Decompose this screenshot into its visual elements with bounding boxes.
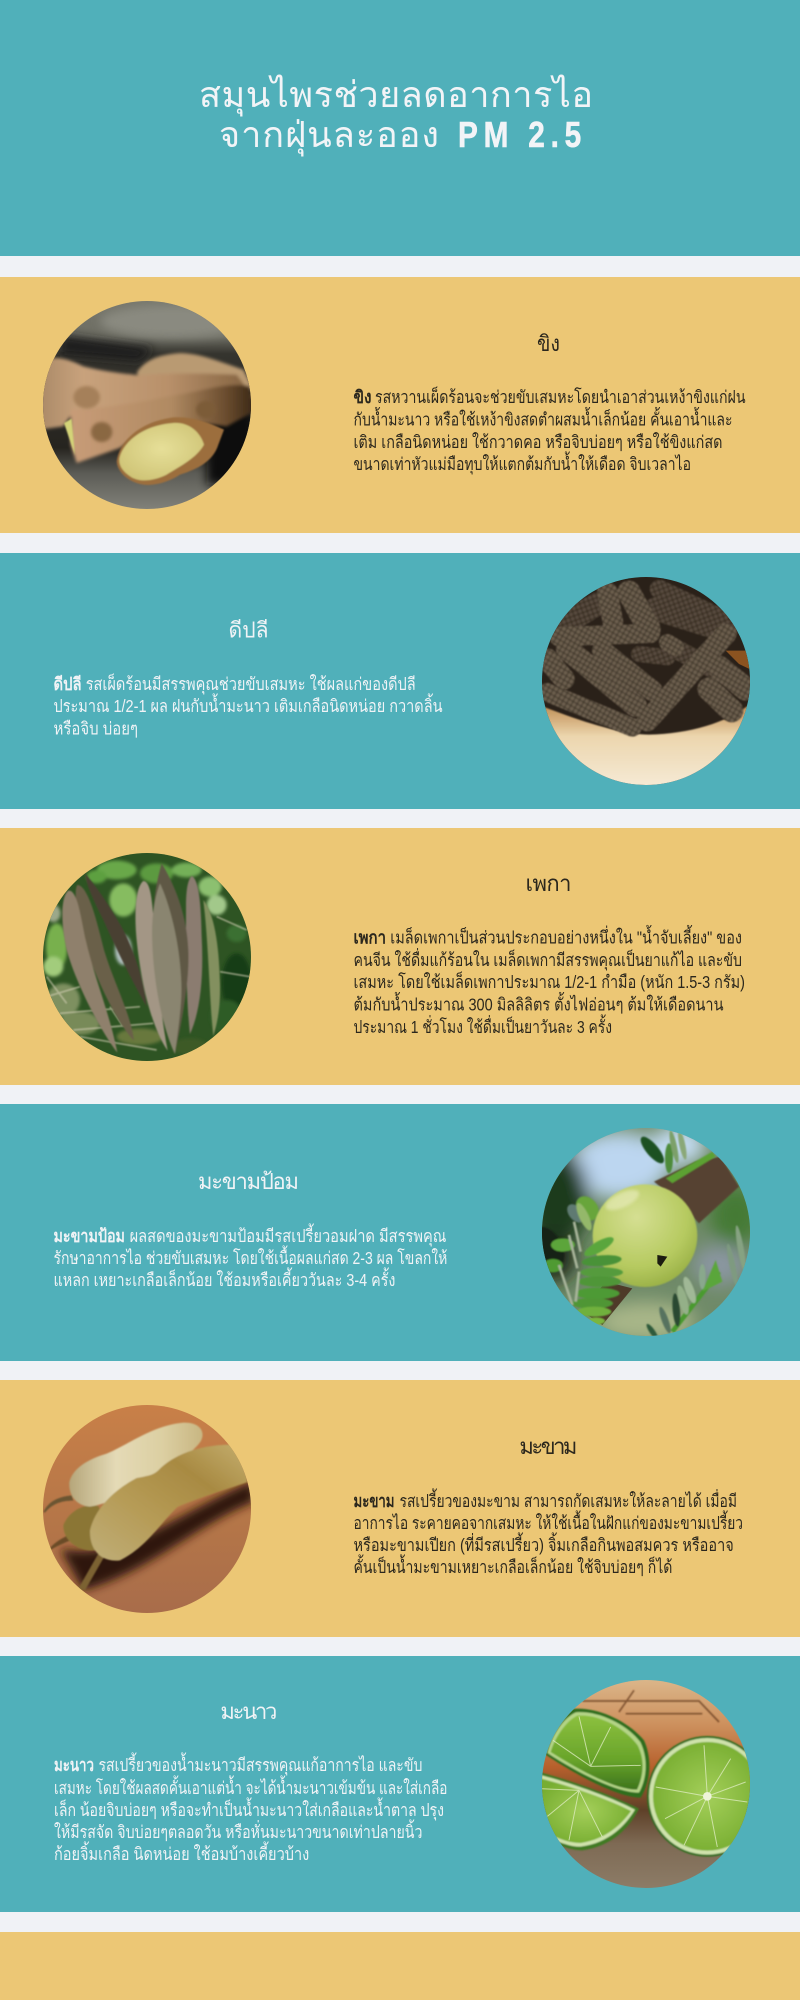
panel: ginger — [0, 277, 800, 533]
text: long pepper: ประมาณ 1/2-1 ผล ฝนกับน้ำมะนาว เติมเกลือนิดหน่อย กวาดลิ้น — [54, 693, 443, 716]
panel: lime — [0, 1656, 800, 1912]
text: amla: มะขามป้อม — [54, 1226, 125, 1246]
heading: amla: มะขามป้อม — [198, 1169, 299, 1194]
text: amla: แหลก เหยาะเกลือเล็กน้อย ใช้อมหรือเคี้ยววันละ 3-4 ครั้ง — [54, 1267, 395, 1290]
text: lime: ให้มีรสจัด จิบบ่อยๆตลอดวัน หรือหั่นมะนาวขนาดเท่าปลายนิ้ว — [54, 1819, 422, 1842]
photo: tamarind — [40, 1402, 254, 1616]
text: lime: เสมหะ โดยใช้ผลสดคั้นเอาแต่น้ำ จะได้น้ำมะนาวเข้มข้น และใส่เกลือ — [54, 1775, 447, 1798]
title: จากฝุ่นละออง — [219, 114, 439, 157]
photo: ginger — [40, 298, 254, 512]
panel: long pepper — [0, 553, 800, 809]
text: tamarind — [354, 1488, 743, 1577]
photo: lime — [542, 1680, 750, 1888]
photo: long pepper — [539, 574, 753, 788]
text: ginger: ขนาดเท่าหัวแม่มือทุบให้แตกต้มกับน้ำให้เดือด จิบเวลาไอ — [354, 451, 691, 475]
text: pheka — [354, 924, 745, 1037]
text: lime: มะนาว — [54, 1755, 94, 1775]
panel: header — [0, 0, 800, 256]
text: lime — [54, 1752, 447, 1864]
text: long pepper: หรือจิบ บ่อยๆ — [54, 718, 138, 738]
text: pheka: ประมาณ 1 ชั่วโมง ใช้ดื่มเป็นยาวันละ 3 ครั้ง — [354, 1014, 612, 1037]
text: amla: รักษาอาการไอ ช่วยขับเสมหะ โดยใช้เนื้อผลแก่สด 2-3 ผล โขลกให้ — [54, 1245, 447, 1268]
panel: footer band — [0, 1932, 800, 2000]
heading: tamarind: มะขาม — [519, 1434, 577, 1459]
text: long pepper: รสเผ็ดร้อนมีสรรพคุณช่วยขับเสมหะ ใช้ผลแก่ของดีปลี — [86, 673, 416, 695]
text: tamarind: มะขาม — [354, 1491, 394, 1511]
text: long pepper — [54, 673, 443, 738]
text: lime: เล็ก น้อยจิบบ่อยๆ หรือจะทำเป็นน้ำมะนาวใส่เกลือและน้ำตาล ปรุง — [54, 1797, 444, 1821]
panel: tamarind — [0, 1380, 800, 1637]
panel: amla — [0, 1104, 800, 1361]
photo: amla — [542, 1128, 750, 1336]
heading: ginger: ขิง — [537, 331, 560, 356]
text: ginger — [354, 386, 746, 475]
text: lime: ก้อยจิ้มเกลือ นิดหน่อย ใช้อมบ้างเคี้ยวบ้าง — [54, 1841, 309, 1864]
heading: lime: มะนาว — [220, 1699, 277, 1724]
text: tamarind: คั้นเป็นน้ำมะขามเหยาะเกลือเล็กน้อย ใช้จิบบ่อยๆ ก็ได้ — [354, 1554, 672, 1577]
title: PM 2.5 — [458, 114, 587, 155]
text: ginger: ขิง — [354, 387, 372, 407]
title — [199, 74, 593, 157]
text: pheka: เพกา — [354, 928, 386, 948]
heading: long pepper: ดีปลี — [228, 618, 268, 642]
text: amla — [54, 1223, 447, 1290]
panel: pheka — [0, 828, 800, 1085]
text: amla: ผลสดของมะขามป้อมมีรสเปรี้ยวอมฝาด มีสรรพคุณ — [130, 1223, 446, 1247]
title: สมุนไพรช่วยลดอาการไอ — [199, 74, 593, 117]
text: lime: รสเปรี้ยวของน้ำมะนาวมีสรรพคุณแก้อาการไอ และขับ — [98, 1752, 422, 1776]
text: tamarind: หรือมะขามเปียก (ที่มีรสเปรี้ยว) จิ้มเกลือกินพอสมควร หรืออาจ — [354, 1532, 734, 1555]
heading: pheka: เพกา — [526, 871, 572, 896]
photo: pheka pods — [40, 850, 254, 1064]
text: ginger: เติม เกลือนิดหน่อย ใช้กวาดคอ หรือจิบบ่อยๆ หรือใช้ขิงแก่สด — [354, 432, 722, 452]
text: long pepper: ดีปลี — [54, 674, 82, 694]
text: pheka: ต้มกับน้ำประมาณ 300 มิลลิลิตร ตั้งไฟอ่อนๆ ต้มให้เดือดนาน — [354, 992, 724, 1014]
